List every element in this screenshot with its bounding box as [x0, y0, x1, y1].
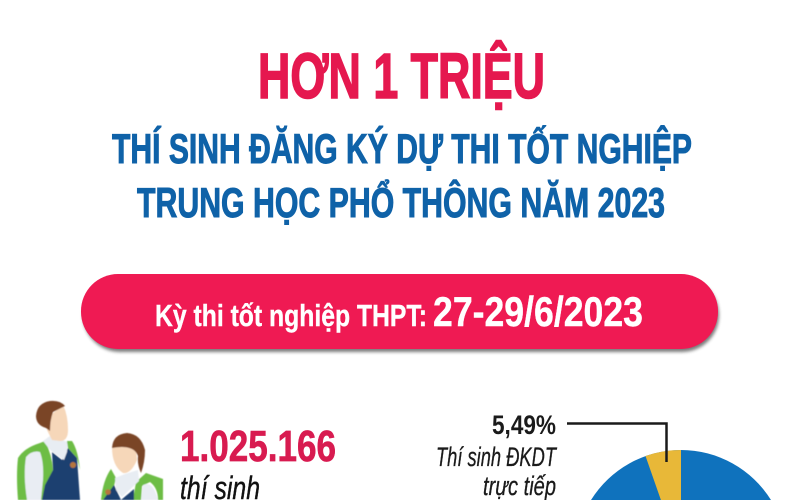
total count: 1.025.166 [180, 422, 336, 471]
callout leader line [567, 424, 666, 462]
callout percent: 5,49% [492, 410, 556, 440]
icon: two students [17, 401, 163, 500]
callout label: Thí sinh ĐKDT [436, 442, 558, 472]
male student [17, 401, 80, 500]
banner date: 27-29/6/2023 [433, 288, 643, 335]
banner label: Kỳ thi tốt nghiệp THPT: [155, 298, 427, 333]
female student [101, 433, 163, 500]
title: Hơn 1 triệu: HƠN 1 TRIỆU [258, 39, 545, 112]
callout label [436, 442, 558, 500]
pie chart [591, 450, 771, 500]
date banner [81, 274, 719, 352]
